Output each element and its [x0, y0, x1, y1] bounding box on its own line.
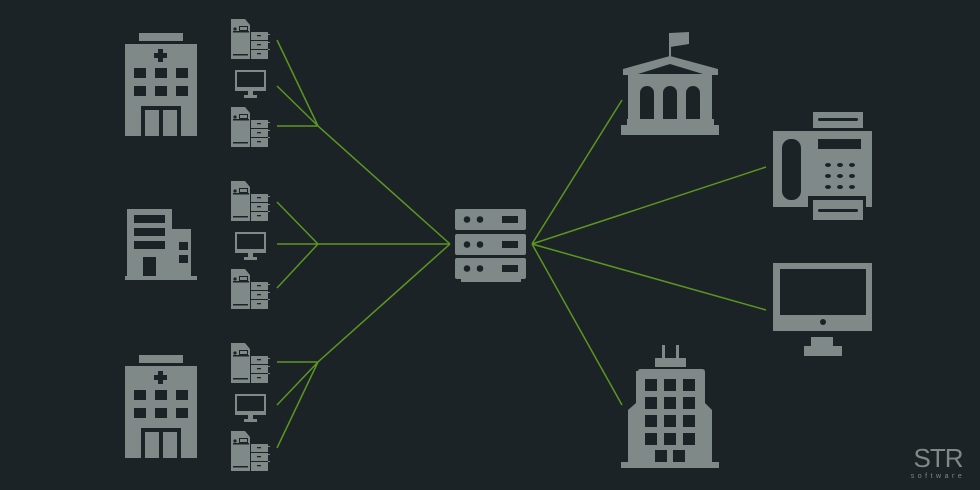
icon: hospital 2: [125, 355, 197, 458]
icon: large monitor: [773, 263, 872, 356]
logo: STR software: software: [911, 473, 965, 480]
icon: hospital 1: [125, 33, 197, 136]
icon: server: [455, 209, 526, 282]
icon: tall office building: [621, 345, 719, 468]
devices group 2: [231, 181, 270, 309]
connection lines: [277, 40, 766, 448]
icon: government bank: [621, 32, 719, 135]
logo: STR software: STR: [914, 443, 963, 473]
icon: fax machine: [773, 112, 872, 220]
devices group 3: [231, 343, 270, 471]
icon: office building: [125, 209, 197, 280]
devices group 1: [231, 19, 270, 147]
